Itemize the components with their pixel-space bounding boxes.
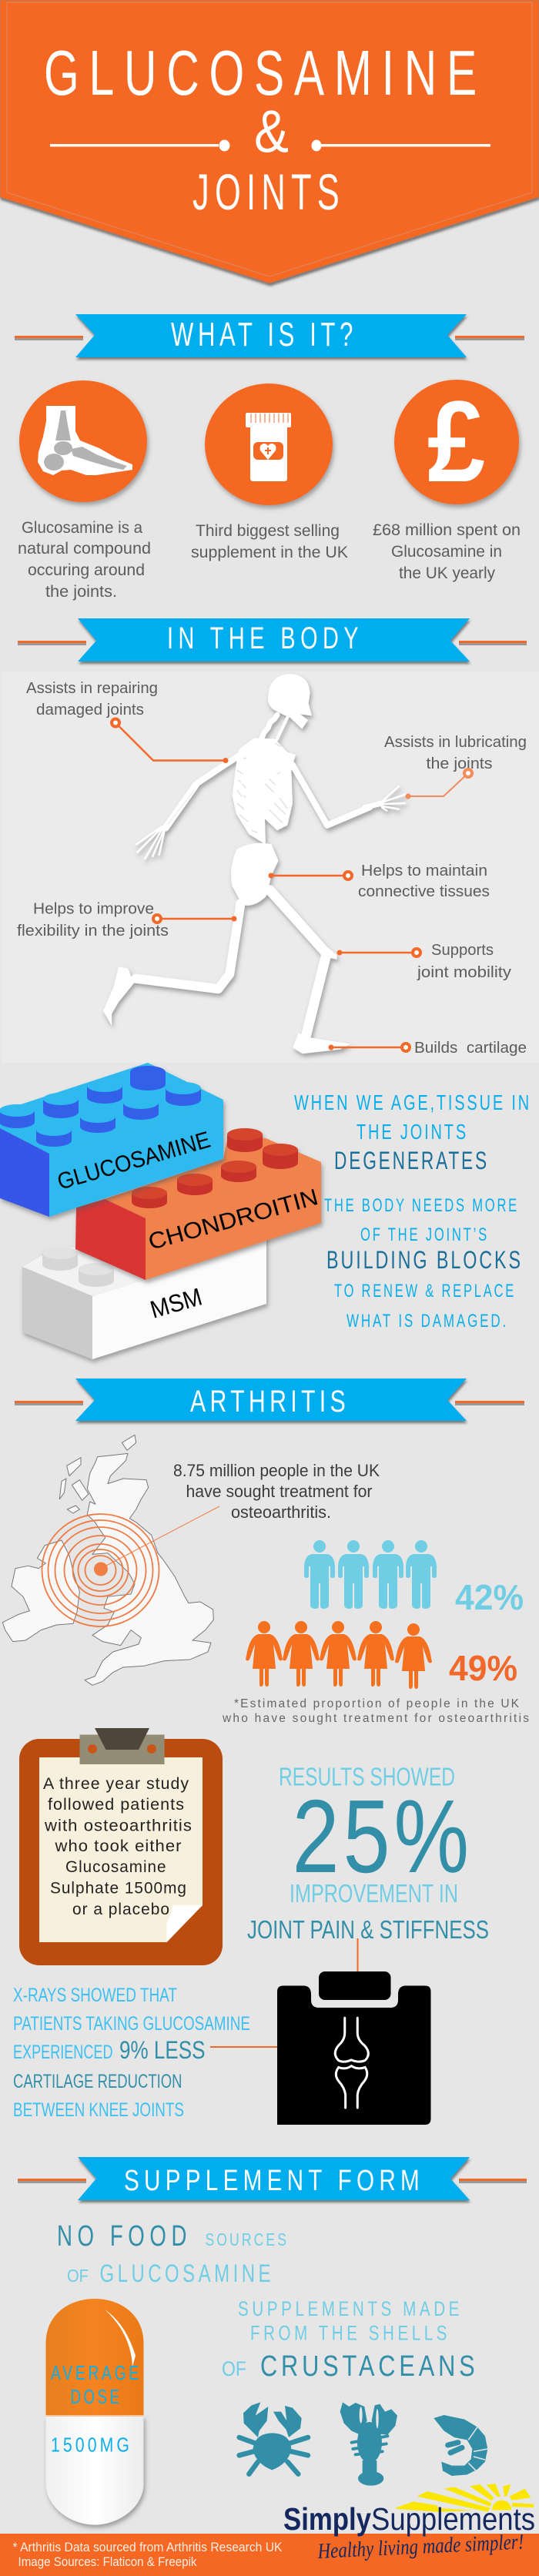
text: study description: Glucosamine xyxy=(65,1858,166,1876)
text: x-rays: X-RAYS SHOWED THAT xyxy=(13,1985,177,2006)
callout: builds cartilage: Builds cartilage xyxy=(414,1039,527,1057)
pictogram: women xyxy=(246,1621,432,1689)
panel: foot fact xyxy=(18,380,151,601)
text: sources xyxy=(12,2540,283,2569)
stat: 25% improvement xyxy=(247,1762,489,1944)
callout: repairing damaged joints: Assists in repairing xyxy=(26,679,158,697)
text: 8.75 million: have sought treatment for xyxy=(186,1482,373,1501)
callout: flexibility: flexibility in the joints xyxy=(17,922,169,940)
text: x-rays: EXPERIENCED xyxy=(13,2042,112,2063)
map of UK with rings xyxy=(2,1435,219,1685)
text: natural compound: natural compound xyxy=(18,539,151,558)
ribbon: in the body xyxy=(18,618,527,662)
text: tissue degenerates xyxy=(294,1090,531,1174)
brick: chondroitin xyxy=(75,1128,321,1280)
skeleton runner xyxy=(103,674,406,1054)
footnote: estimated proportion xyxy=(222,1697,529,1725)
connector line xyxy=(357,1938,359,1973)
stat: 25% improvement: 25% xyxy=(293,1778,473,1894)
title: ampersand with rules xyxy=(50,97,490,165)
text: study description: with osteoarthritis xyxy=(44,1817,192,1834)
footnote: estimated proportion: *Estimated proportion of people in the UK xyxy=(234,1697,520,1710)
text: 8.75 million: 8.75 million people in the UK xyxy=(173,1461,380,1480)
callout: repairing damaged joints: damaged joints xyxy=(36,701,144,719)
connector line xyxy=(210,2046,277,2048)
text: supplements from crustaceans: OF xyxy=(222,2357,246,2380)
text: spend: the UK yearly xyxy=(399,564,495,582)
text: no food sources: NO FOOD xyxy=(57,2220,192,2253)
callout: joint mobility xyxy=(337,941,512,981)
text: building blocks xyxy=(324,1195,523,1332)
text: no food sources: OF xyxy=(67,2266,89,2286)
icon: pound sign in circle: £ xyxy=(427,377,485,506)
text: sources: Image Sources: Flaticon & Freepik xyxy=(18,2554,197,2569)
skeleton: upper body xyxy=(136,674,370,859)
callout: flexibility xyxy=(17,899,237,940)
logo: simply supplements xyxy=(283,2484,535,2564)
panel: bottle fact xyxy=(191,384,349,561)
text: natural compound: the joints. xyxy=(45,582,117,601)
callout: connective tissues xyxy=(268,862,490,900)
text: supplements from crustaceans: SUPPLEMENTS MADE xyxy=(238,2297,463,2320)
text: third biggest: supplement in the UK xyxy=(191,543,349,561)
ribbon: supplement form: SUPPLEMENT FORM xyxy=(124,2165,424,2197)
skeleton: lower body and hand xyxy=(103,786,406,1054)
text: x-rays xyxy=(13,1985,250,2121)
text: spend: £68 million spent on xyxy=(373,521,521,539)
icon: supplement bottle in circle xyxy=(205,384,333,505)
callout: joint mobility: joint mobility xyxy=(417,963,512,981)
icon: crab xyxy=(239,2402,308,2474)
brick: msm xyxy=(22,1224,266,1359)
text: x-rays: PATIENTS TAKING GLUCOSAMINE xyxy=(13,2013,250,2035)
text: spend: Glucosamine in xyxy=(391,542,502,561)
callout: repairing damaged joints xyxy=(26,679,228,763)
text: study description: who took either xyxy=(54,1837,182,1855)
callout: builds cartilage xyxy=(328,1039,527,1057)
icon: knee bones xyxy=(335,2018,368,2108)
panel: spending fact xyxy=(373,377,521,582)
title: ampersand with rules: & xyxy=(254,97,289,165)
callout: flexibility: Helps to improve xyxy=(33,899,154,918)
logo: simply supplements: Simply xyxy=(283,2501,371,2537)
text: dose: 1500MG xyxy=(51,2434,132,2457)
text: natural compound: occuring around xyxy=(28,561,145,579)
text: study description: or a placebo xyxy=(72,1901,170,1918)
text: x-rays: 9% LESS xyxy=(119,2036,205,2064)
callout: connective tissues: Helps to maintain xyxy=(361,862,487,879)
ribbon: arthritis: ARTHRITIS xyxy=(190,1385,350,1419)
text: tissue degenerates: THE JOINTS xyxy=(357,1120,468,1144)
brick: glucosamine: GLUCOSAMINE xyxy=(55,1127,213,1195)
brick: chondroitin: CHONDROITIN xyxy=(146,1184,321,1255)
icon: sun xyxy=(395,2484,534,2512)
text: study description: A three year study xyxy=(43,1775,189,1793)
icon: lobster xyxy=(340,2402,397,2486)
icon: x-ray knee clipboard xyxy=(277,1971,431,2125)
title: joints: JOINTS xyxy=(192,163,345,220)
text: x-rays: BETWEEN KNEE JOINTS xyxy=(13,2099,184,2121)
ribbon: in the body: IN THE BODY xyxy=(167,621,363,655)
text: no food sources: SOURCES xyxy=(205,2229,289,2249)
callout: lubricating the joints xyxy=(384,733,527,799)
text: study description: Sulphate 1500mg xyxy=(50,1879,187,1898)
icon: pound sign in circle xyxy=(394,377,519,506)
stat: 42%: 42% xyxy=(455,1577,524,1617)
text: dose: AVERAGE xyxy=(51,2361,142,2384)
text: study description: followed patients xyxy=(48,1796,185,1814)
clipboard: three year study xyxy=(19,1728,223,1965)
text: 8.75 million xyxy=(173,1461,380,1522)
text: natural compound xyxy=(18,518,151,601)
brick: glucosamine xyxy=(0,1063,223,1217)
title banner xyxy=(0,0,539,283)
icon: foot in circle xyxy=(19,380,147,502)
text: supplements from crustaceans xyxy=(222,2297,479,2383)
callout: lubricating the joints: the joints xyxy=(427,755,493,772)
text: no food sources xyxy=(57,2220,289,2287)
text: natural compound: Glucosamine is a xyxy=(22,518,142,537)
text: third biggest: Third biggest selling xyxy=(196,521,340,540)
ribbon: what is it: WHAT IS IT? xyxy=(171,316,357,353)
callout: connective tissues: connective tissues xyxy=(358,883,490,900)
concentric target rings xyxy=(42,1506,219,1626)
footnote: estimated proportion: who have sought treatment for osteoarthritis xyxy=(222,1712,529,1725)
text: sources: * Arthritis Data sourced from Arthritis Research UK xyxy=(12,2540,283,2554)
capsule: average dose xyxy=(46,2299,143,2524)
callout: joint mobility: Supports xyxy=(431,941,494,959)
ribbon: what is it xyxy=(15,314,524,357)
icon: shrimp xyxy=(434,2415,487,2476)
footer band xyxy=(0,2534,539,2576)
brick: msm: MSM xyxy=(147,1282,205,1324)
stat: 25% improvement: RESULTS SHOWED xyxy=(279,1762,455,1791)
text: dose xyxy=(51,2361,142,2457)
text: dose: DOSE xyxy=(71,2385,122,2408)
text: supplements from crustaceans: FROM THE SHELLS xyxy=(250,2321,450,2344)
text: spend xyxy=(373,521,521,582)
stat: 49%: 49% xyxy=(449,1648,517,1688)
lego bricks xyxy=(0,1063,321,1359)
map: britain and ireland xyxy=(2,1435,213,1685)
panel: in the body background xyxy=(2,672,539,1063)
callout: lubricating the joints: Assists in lubricating xyxy=(384,733,527,751)
ribbon: supplement form xyxy=(18,2157,527,2200)
text: study description xyxy=(43,1775,192,1918)
text: no food sources: GLUCOSAMINE xyxy=(100,2259,274,2287)
text: x-rays: CARTILAGE REDUCTION xyxy=(13,2071,182,2092)
text: third biggest xyxy=(191,521,349,561)
pictogram: men xyxy=(304,1540,437,1609)
stat: 25% improvement: IMPROVEMENT IN xyxy=(290,1879,458,1908)
text: supplements from crustaceans: CRUSTACEANS xyxy=(260,2350,479,2383)
text: 8.75 million: osteoarthritis. xyxy=(231,1502,331,1522)
ribbon: arthritis xyxy=(15,1378,524,1421)
